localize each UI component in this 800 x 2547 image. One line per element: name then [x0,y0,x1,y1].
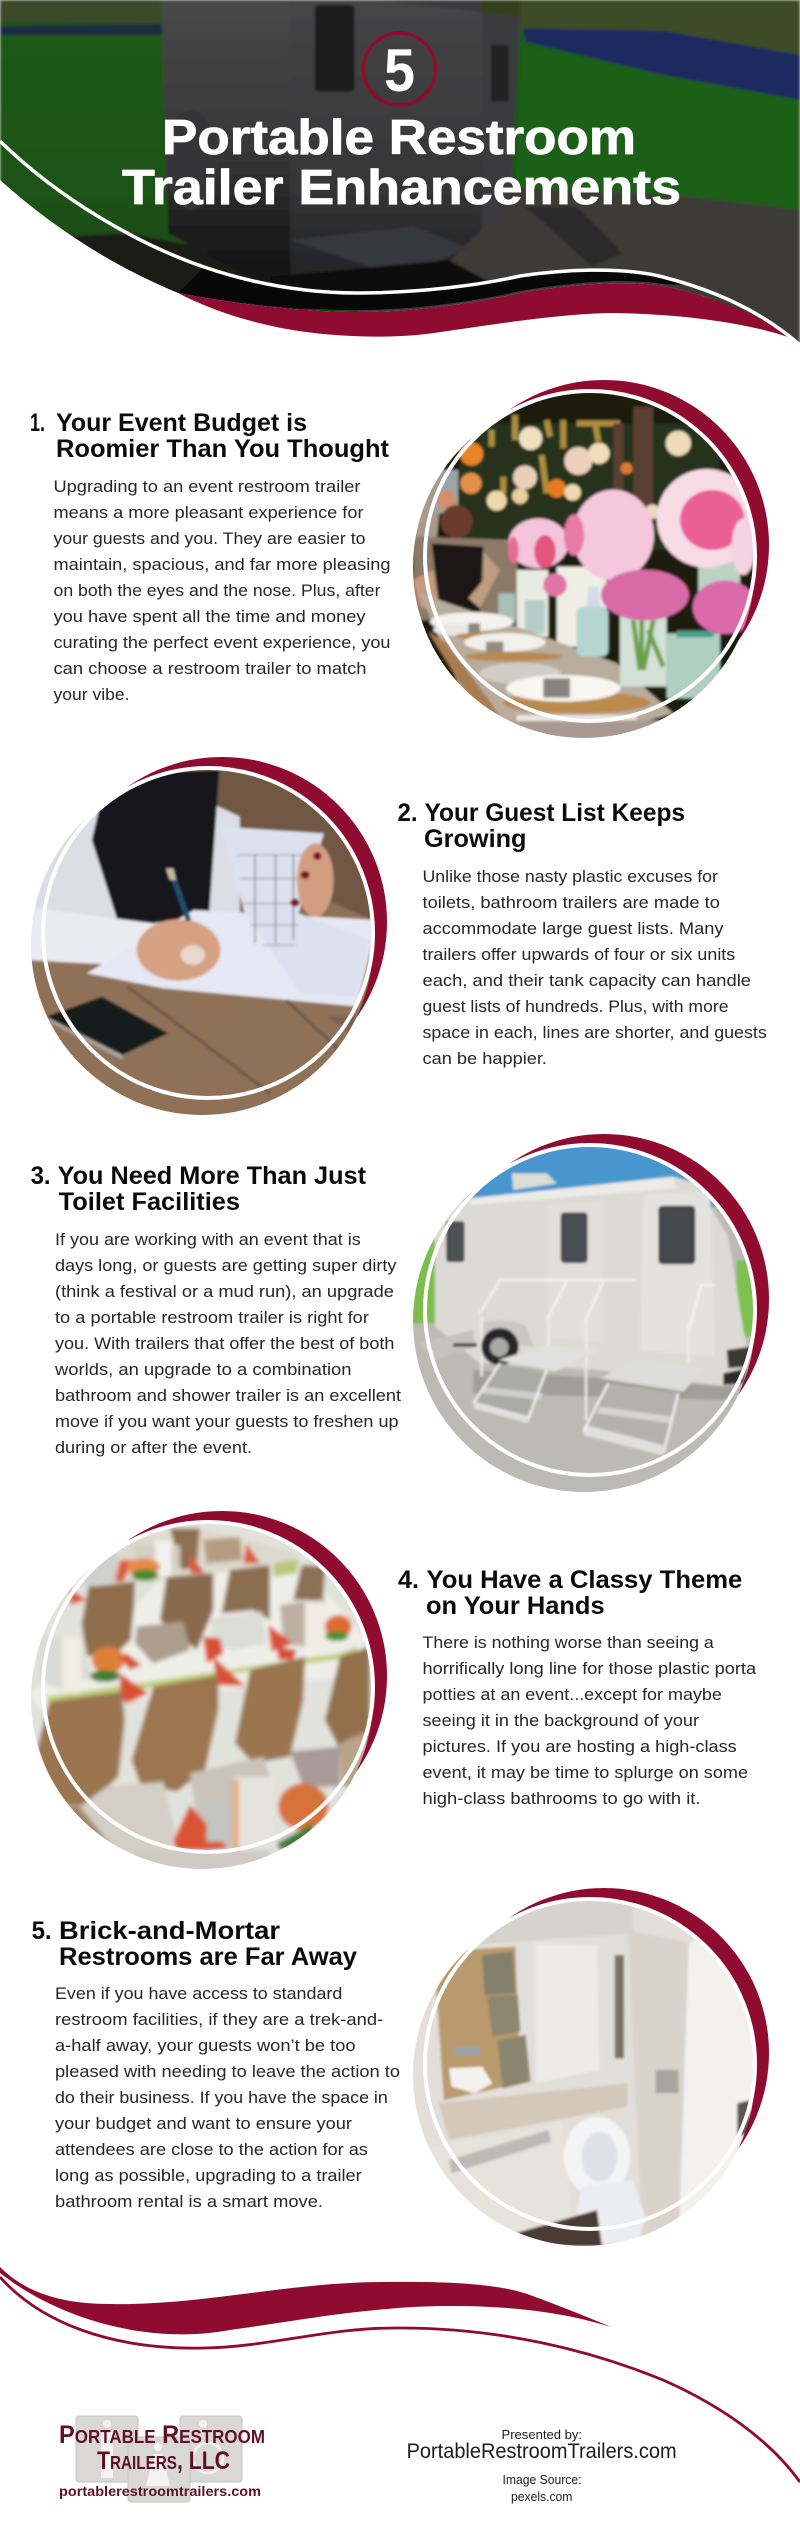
heading 3: You Need More Than Just [58,1162,367,1190]
heading 1: Your Event Budget is [56,409,307,437]
text block 2 [422,867,767,1068]
text block 4: There is nothing worse than seeing a [422,1633,714,1652]
logo text: Portable Restroom [59,2421,265,2449]
panel: section 1 [30,380,773,747]
logo text: Trailers, LLC [97,2447,230,2475]
photo: banquet chairs and tables [27,1520,387,1877]
text block 3: days long, or guests are getting super dirty [55,1256,397,1275]
logo text [59,2421,265,2499]
footer wave: red ribbon [0,2267,611,2334]
heading 1 [30,409,390,463]
heading 5: Restrooms are Far Away [59,1943,357,1971]
number badge [364,33,436,105]
red crescent 5 [439,1888,769,2218]
text block 2: trailers offer upwards of four or six units [422,945,735,964]
text block 1: curating the perfect event experience, you [54,633,390,652]
heading 5: 5. [32,1917,52,1945]
red crescent 1 [439,380,769,710]
heading 4: on Your Hands [426,1592,605,1620]
text block 2: guest lists of hundreds. Plus, with more [422,997,728,1016]
white ring 1 [425,391,755,721]
photo: event table with pink flowers [413,393,754,738]
text block 5: your budget and want to ensure your [55,2114,352,2133]
heading 3: 3. [31,1162,51,1190]
text block 1: maintain, spacious, and far more pleasing [54,555,390,574]
photo: hand writing on paper [31,770,372,1115]
text block 4: horrifically long line for those plastic porta [422,1659,757,1678]
presented by block: Image Source: [502,2473,582,2487]
header wave: white line [0,141,800,345]
presented by block: PortableRestroomTrailers.com [407,2440,677,2463]
panel: section 2 [15,757,767,1127]
red crescent 2 [57,757,387,1087]
text block 1: can choose a restroom trailer to match [54,659,366,678]
text block 3: If you are working with an event that is [55,1230,361,1249]
text block 1: Upgrading to an event restroom trailer [54,477,361,496]
text block 5: pleased with needing to leave the action to [55,2062,400,2081]
heading 3: Toilet Facilities [59,1188,240,1216]
text block 4: pictures. If you are hosting a high-class [422,1737,737,1756]
text block 2: each, and their tank capacity can handle [422,971,751,990]
photo: trailer bathroom with toilet [413,1901,754,2246]
text block 5: restroom facilities, if they are a trek-and- [55,2010,383,2029]
heading 4 [398,1566,742,1620]
text block 5 [55,1984,400,2211]
text block 4: high-class bathrooms to go with it. [422,1789,700,1808]
heading 2 [398,799,685,853]
text block 4: potties at an event...except for maybe [422,1685,722,1704]
text block 2: toilets, bathroom trailers are made to [422,893,720,912]
title: Portable Restroom [162,111,636,165]
heading 3 [31,1162,367,1216]
text block 1: your vibe. [54,685,130,704]
text block 1: on both the eyes and the nose. Plus, after [54,581,381,600]
panel: section 5 [32,1888,776,2260]
heading 2: Growing [424,825,526,853]
text block 3: you. With trailers that offer the best of both [55,1334,394,1353]
text block 5: do their business. If you have the space in [55,2088,388,2107]
red crescent 4 [57,1511,387,1841]
text block 5: Even if you have access to standard [55,1984,342,2003]
text block 5: bathroom rental is a smart move. [55,2192,323,2211]
text block 2: space in each, lines are shorter, and guests [422,1023,767,1042]
text block 2: Unlike those nasty plastic excuses for [422,867,718,886]
heading 5 [32,1917,357,1971]
logo restroom figures [101,2420,223,2486]
presented by block: Presented by: [502,2428,582,2442]
white ring 3 [425,1145,755,1475]
text block 2: accommodate large guest lists. Many [422,919,724,938]
heading 1: 1. [30,409,45,437]
black band between wave lines [178,267,690,310]
heading 5: Brick-and-Mortar [59,1917,280,1945]
white cover below header wave [0,180,800,420]
text block 4 [422,1633,757,1808]
text block 4: event, it may be time to splurge on some [422,1763,748,1782]
logo [59,2416,265,2502]
title [122,111,681,215]
photo: restroom trailer with steps [413,1147,754,1492]
footer wave: thin line [0,2277,800,2482]
text block 2: can be happier. [422,1049,547,1068]
text block 1: your guests and you. They are easier to [54,529,366,548]
text block 1: you have spent all the time and money [54,607,366,626]
heading 4: 4. [398,1566,419,1594]
text block 5: a-half away, your guests won’t be too [55,2036,356,2055]
text block 3: to a portable restroom trailer is right for [55,1308,369,1327]
presented by block [407,2428,677,2504]
logo plaques [76,2416,242,2502]
text block 5: long as possible, upgrading to a trailer [55,2166,362,2185]
number badge: 5 [384,37,415,104]
header photo: trailer on lawn, darkened [0,0,800,353]
heading 2: Your Guest List Keeps [424,799,685,827]
white ring 2 [43,768,373,1098]
header wave: red ribbon [178,283,800,342]
presented by block: pexels.com [511,2490,572,2504]
panel: header [0,0,800,420]
text block 4: seeing it in the background of your [422,1711,699,1730]
heading 1: Roomier Than You Thought [56,435,390,463]
text block 3: during or after the event. [55,1438,252,1457]
logo text: portablerestroomtrailers.com [59,2483,261,2499]
panel: section 4 [27,1511,757,1877]
white ring 4 [43,1522,373,1852]
text block 3 [54,1230,401,1457]
text block 3: move if you want your guests to freshen up [55,1412,398,1431]
red crescent 3 [439,1134,769,1464]
white ring 5 [425,1899,755,2229]
text block 3: bathroom and shower trailer is an excellent [55,1386,401,1405]
heading 2: 2. [398,799,418,827]
text block 1: means a more pleasant experience for [54,503,364,522]
title: Trailer Enhancements [122,161,681,215]
text block 5: attendees are close to the action for as [55,2140,368,2159]
panel: section 3 [31,1134,773,1497]
text block 3: (think a festival or a mud run), an upgrade [55,1282,394,1301]
heading 4: You Have a Classy Theme [426,1566,742,1594]
text block 1 [54,477,390,704]
text block 3: worlds, an upgrade to a combination [54,1360,352,1379]
